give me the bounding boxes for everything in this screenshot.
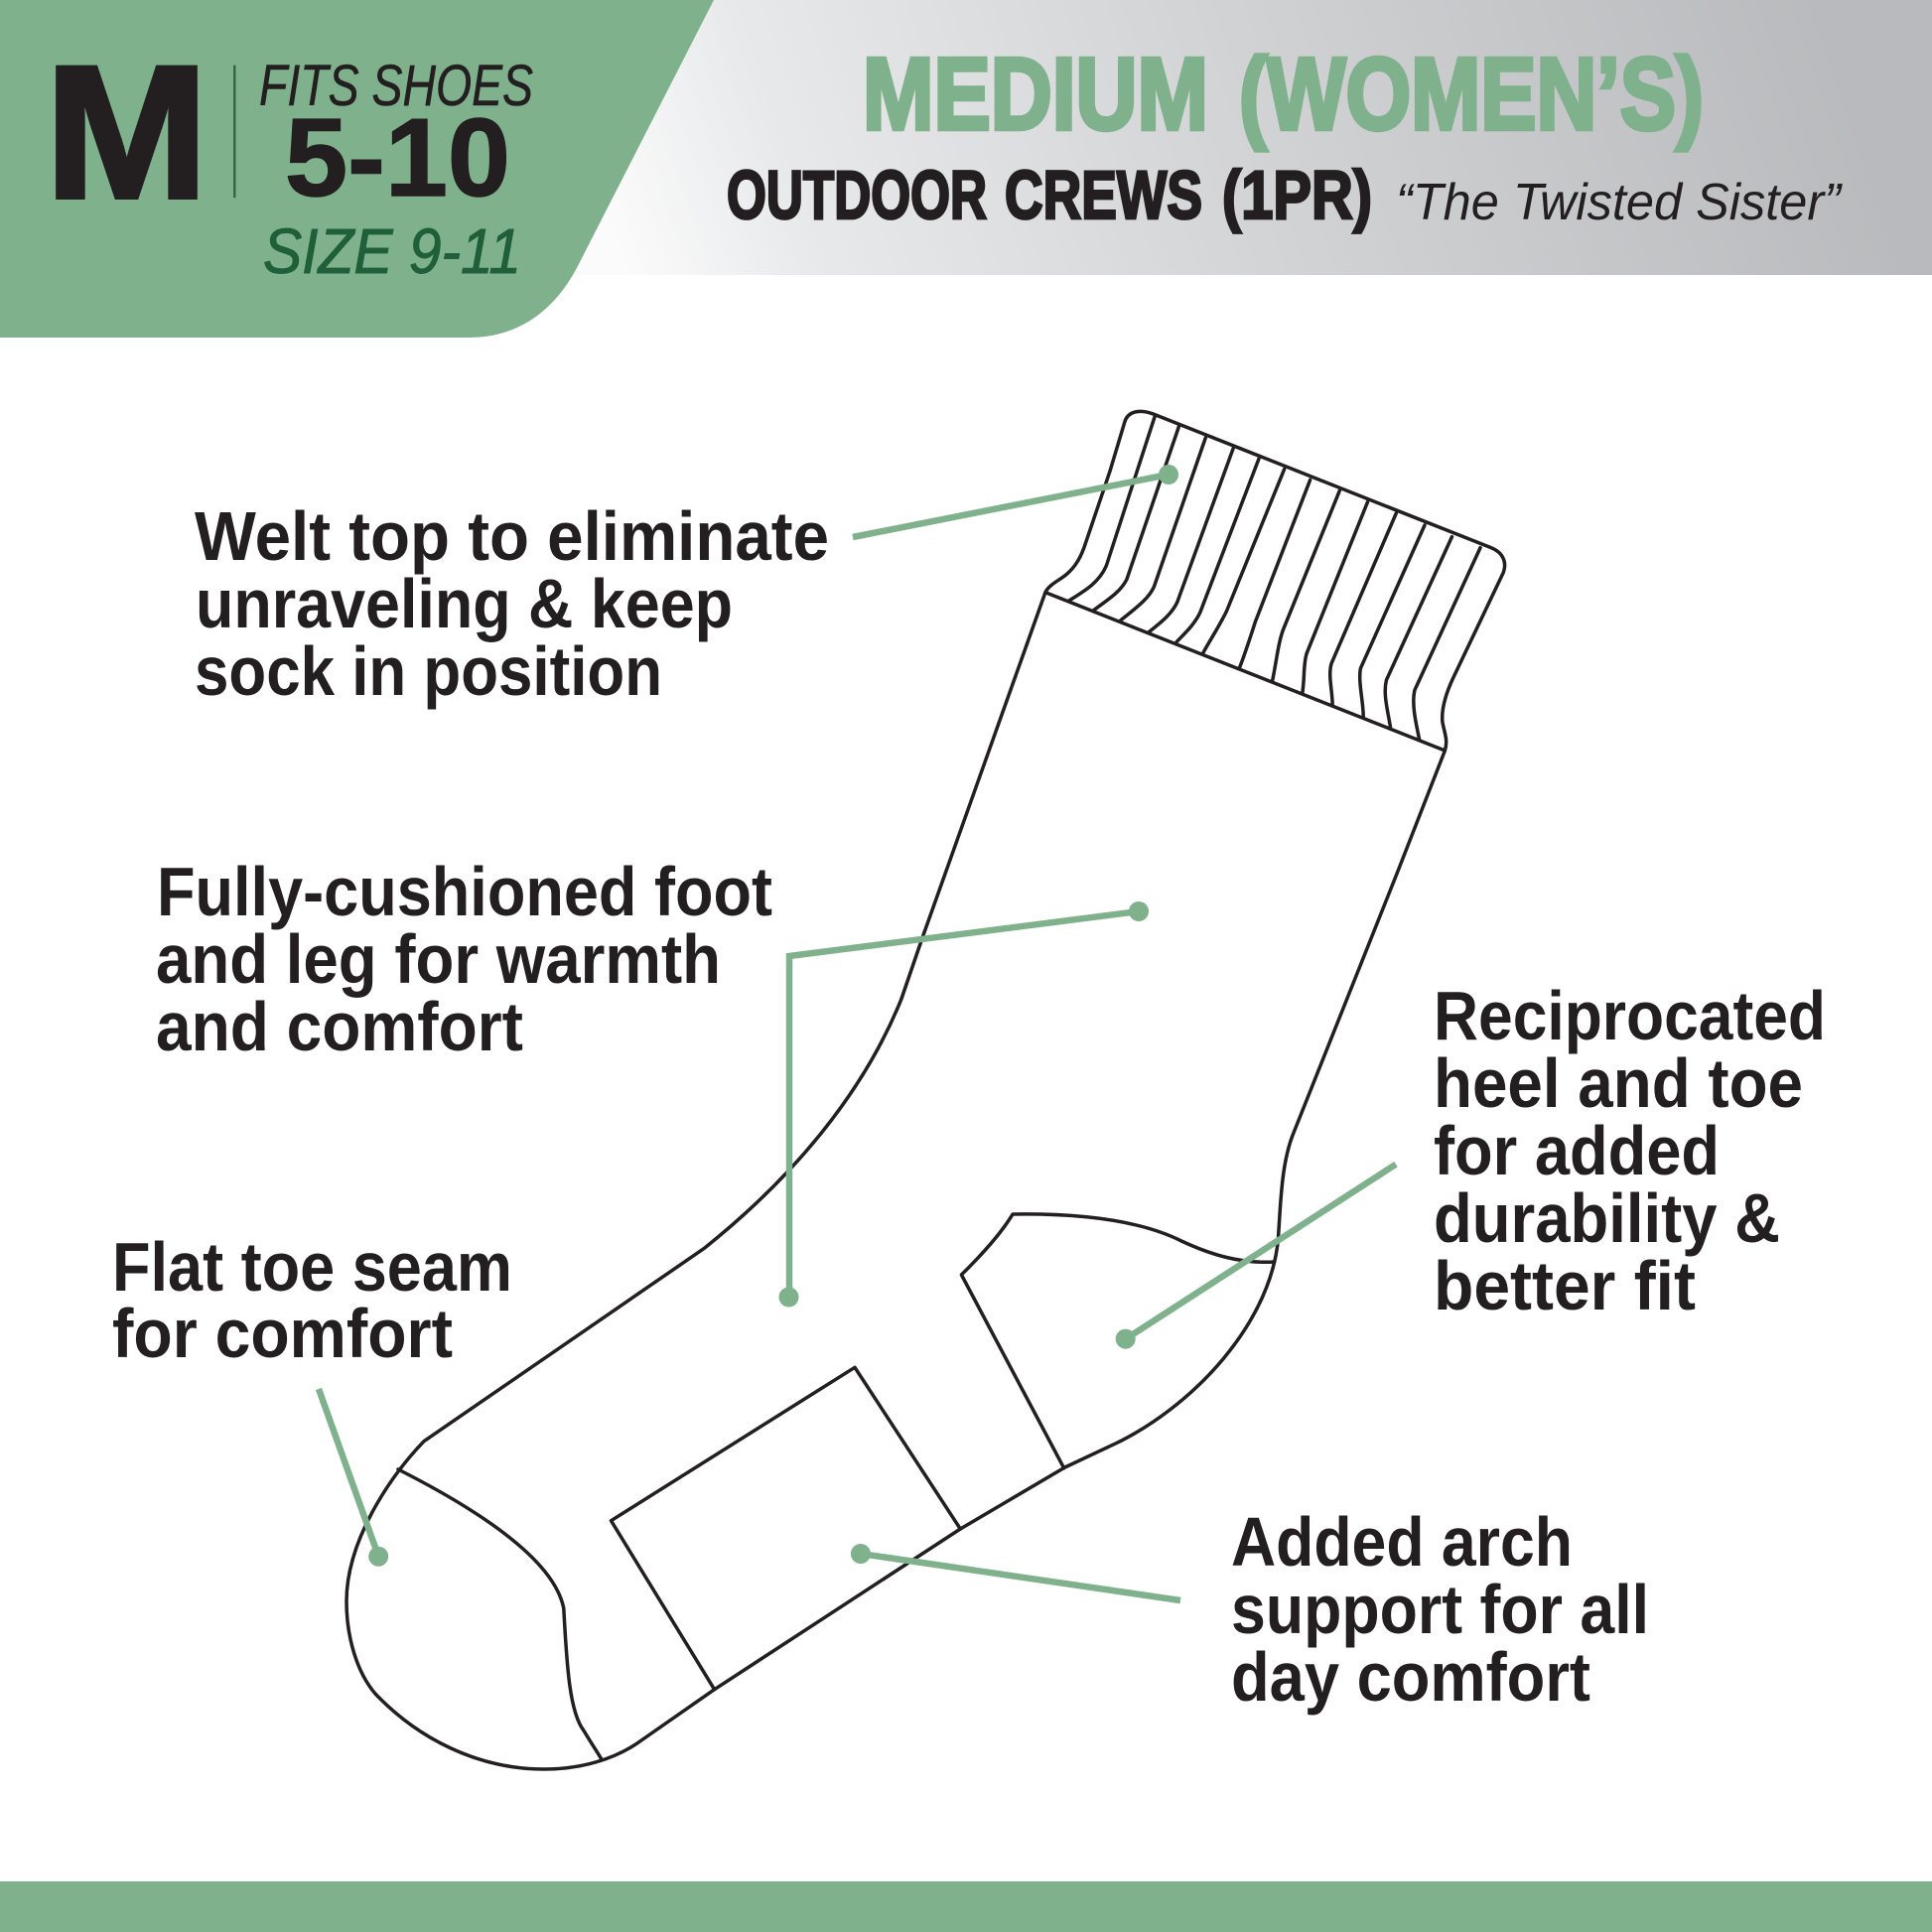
subtitle: CREWS xyxy=(1005,157,1202,233)
subtitle: (1PR) xyxy=(1222,157,1372,233)
size badge xyxy=(0,0,714,338)
fits shoes label: FITS SHOES xyxy=(259,54,533,118)
title: MEDIUM xyxy=(863,37,1208,151)
size letter M: M xyxy=(45,27,208,238)
callout: arch support: support for all xyxy=(1231,1571,1649,1648)
header gradient band xyxy=(556,0,1932,275)
sock outline xyxy=(346,593,1445,1769)
callout: welt top: unraveling & keep xyxy=(196,565,733,642)
callout: arch support xyxy=(1231,1503,1649,1716)
callout: arch support: day comfort xyxy=(1231,1638,1590,1716)
callout: cushioned foot: and comfort xyxy=(156,988,523,1065)
callout: cushioned foot: and leg for warmth xyxy=(156,920,721,998)
callout: welt top xyxy=(195,497,829,710)
shoe size range: 5-10 xyxy=(285,96,510,219)
sock size: SIZE 9-11 xyxy=(263,215,521,287)
callout: heel and toe: Reciprocated xyxy=(1434,977,1826,1054)
callout: arch support: Added arch xyxy=(1231,1503,1573,1581)
footer bar xyxy=(0,1881,1932,1932)
sock illustration xyxy=(346,411,1505,1769)
callout: heel and toe: for added xyxy=(1434,1112,1720,1189)
callout: heel and toe: heel and toe xyxy=(1434,1044,1803,1122)
leader: toe seam xyxy=(319,1389,388,1567)
arch panel xyxy=(612,1367,960,1690)
subtitle xyxy=(727,157,1372,233)
product nickname: “The Twisted Sister” xyxy=(1396,174,1844,231)
callout: heel and toe: better fit xyxy=(1434,1247,1696,1324)
ribbed cuff xyxy=(1045,411,1505,751)
subtitle: OUTDOOR xyxy=(727,157,987,233)
toe seam xyxy=(398,1469,602,1759)
callout: welt top: Welt top to eliminate xyxy=(195,497,829,575)
callout: cushioned foot xyxy=(156,853,772,1065)
callout: toe seam: Flat toe seam xyxy=(112,1228,512,1306)
leader: cushioned foot xyxy=(778,901,1149,1307)
callout: toe seam: for comfort xyxy=(112,1295,453,1372)
leader: arch xyxy=(851,1544,1180,1600)
leader: heel xyxy=(1116,1165,1396,1349)
callout: heel and toe: durability & xyxy=(1434,1179,1780,1257)
callout: cushioned foot: Fully-cushioned foot xyxy=(157,853,772,930)
callout: heel and toe xyxy=(1434,977,1826,1324)
callout: welt top: sock in position xyxy=(195,632,662,710)
heel panel xyxy=(961,1214,1275,1468)
title: (WOMEN’S) xyxy=(1239,37,1704,151)
callout: toe seam xyxy=(112,1228,512,1372)
badge divider xyxy=(233,66,236,198)
leader: welt top xyxy=(853,465,1178,537)
title xyxy=(863,37,1704,151)
